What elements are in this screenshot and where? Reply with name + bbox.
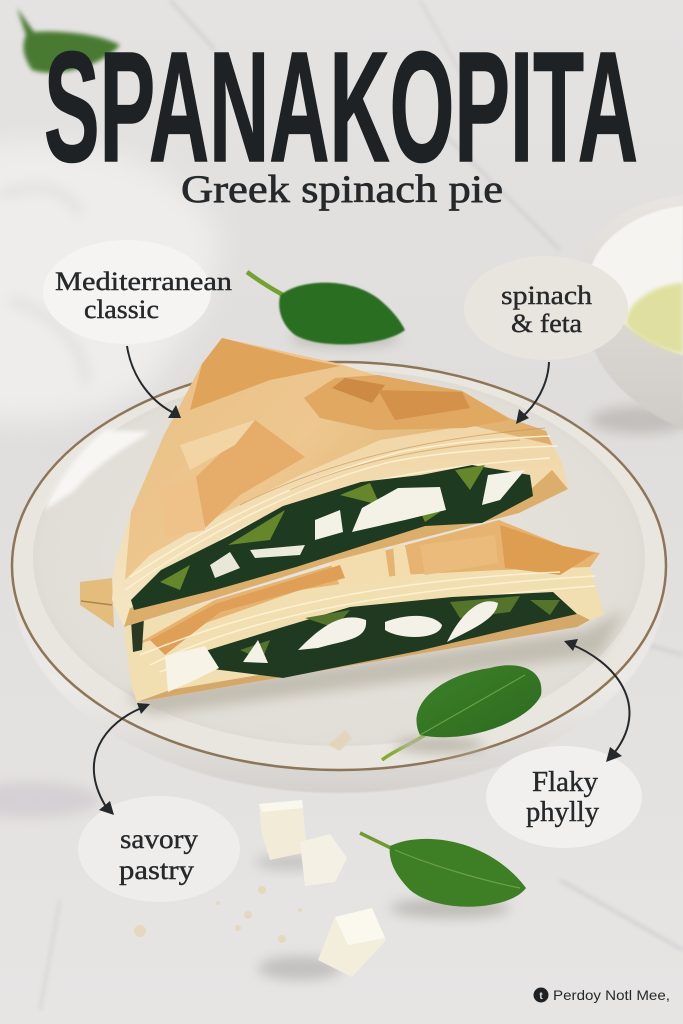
arrow: Flaky phyllo, double headed (564, 639, 629, 762)
upper feta pieces (352, 487, 446, 532)
lower feta pieces (165, 646, 219, 692)
callout: savory pastry: savory (120, 824, 199, 854)
callout: Mediterranean classic: classic (84, 295, 159, 324)
callout: Flaky phyllo: Flaky (532, 767, 598, 798)
lower base edge (137, 614, 590, 702)
credit mark: Perdoy Notl Mee, (553, 987, 670, 1003)
blurred leaf, top left (17, 8, 120, 73)
lower spinach filling (205, 592, 577, 678)
arrow: Mediterranean classic to pie (127, 346, 181, 418)
callout: spinach & feta: spinach (501, 281, 592, 310)
spinach leaf, upper middle (247, 272, 405, 347)
credit mark: t (539, 991, 543, 1002)
white cloth, top left (0, 141, 219, 422)
lower dark edge (131, 618, 144, 652)
pastry crumb (328, 730, 352, 751)
callout: savory pastry (78, 796, 240, 902)
subtitle: Greek spinach pie (181, 168, 503, 211)
upper base edge (124, 470, 568, 627)
upper pie slice (112, 338, 568, 627)
feta cubes and crumbs (134, 800, 386, 980)
arrow: spinach and feta to pie (516, 362, 549, 424)
callout: Flaky phyllo (486, 746, 642, 848)
lower crust (124, 520, 604, 702)
bowl, top right (580, 195, 683, 434)
callout: Flaky phyllo: phylly (526, 797, 599, 828)
upper crust layers (125, 436, 558, 590)
callout: savory pastry: pastry (119, 855, 195, 885)
arrow: savory pastry, double headed (94, 703, 150, 815)
lower pie slice (124, 520, 604, 702)
callout: Mediterranean classic: Mediterranean (55, 267, 232, 296)
plate (12, 362, 666, 793)
pie shadow (125, 610, 625, 715)
upper crust (112, 338, 568, 627)
small phyllo flake, left (80, 578, 114, 628)
callout: Mediterranean classic (43, 240, 232, 344)
spinach leaf on counter (360, 833, 526, 918)
spinach leaf on plate (382, 665, 541, 760)
lower crust layers (140, 572, 595, 672)
upper spinach filling (131, 465, 533, 610)
callout: spinach & feta: & feta (511, 309, 582, 338)
callout: spinach & feta (464, 256, 628, 360)
